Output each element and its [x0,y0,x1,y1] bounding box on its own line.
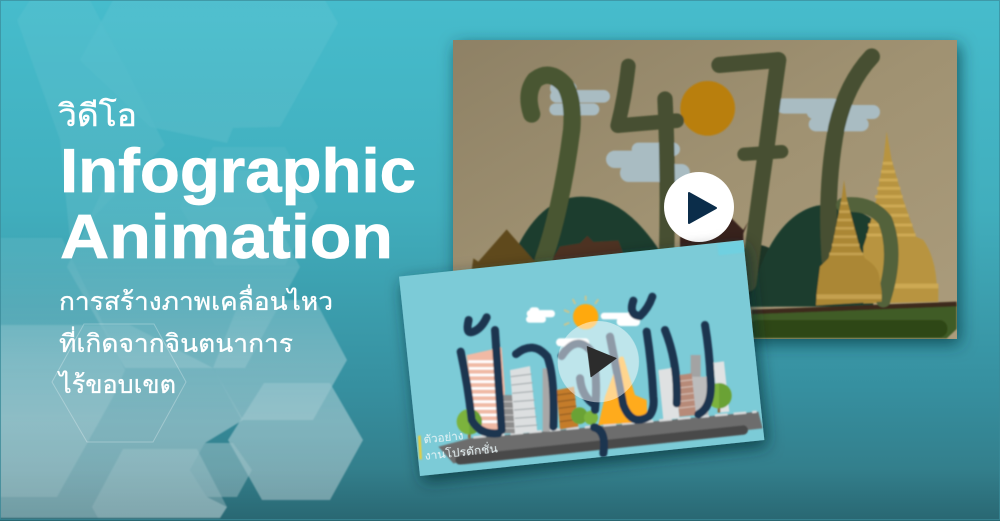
sun [680,81,735,136]
small stupa [816,180,882,305]
temple roofs [472,229,543,283]
caption text [422,427,499,463]
caption text: ตัวอย่าง [423,430,464,446]
heading: Infographic: Infographic [60,137,416,206]
title lettering [461,297,711,453]
watermark [718,242,745,255]
heading: Animation: Animation [60,203,393,272]
text block: description: ที่เกิดจากจินตนาการ [59,326,293,358]
number glyphs [529,57,891,300]
large stupa [863,132,938,303]
heading: video label: วิดีโอ [57,98,137,133]
text block: description: ไร้ขอบเขต [57,370,176,399]
icon: white play button [664,172,734,242]
trees [457,383,732,438]
hexagon outline [52,324,186,442]
sun and rays [573,304,598,329]
clouds [526,307,640,346]
text block: description [57,284,333,399]
buildings [467,347,729,434]
road [438,412,763,463]
panel: video thumbnail 2476 [453,40,957,339]
ground [752,303,957,338]
panel: video thumbnail present day [399,240,764,476]
text block: description: การสร้างภาพเคลื่อนไหว [59,284,333,316]
hexagon pattern [0,1,364,519]
hills [510,197,873,307]
caption text: งานโปรดักชั่น [424,440,499,463]
icon: translucent play button [558,321,639,402]
clouds [549,82,880,182]
caption bar [419,436,421,459]
